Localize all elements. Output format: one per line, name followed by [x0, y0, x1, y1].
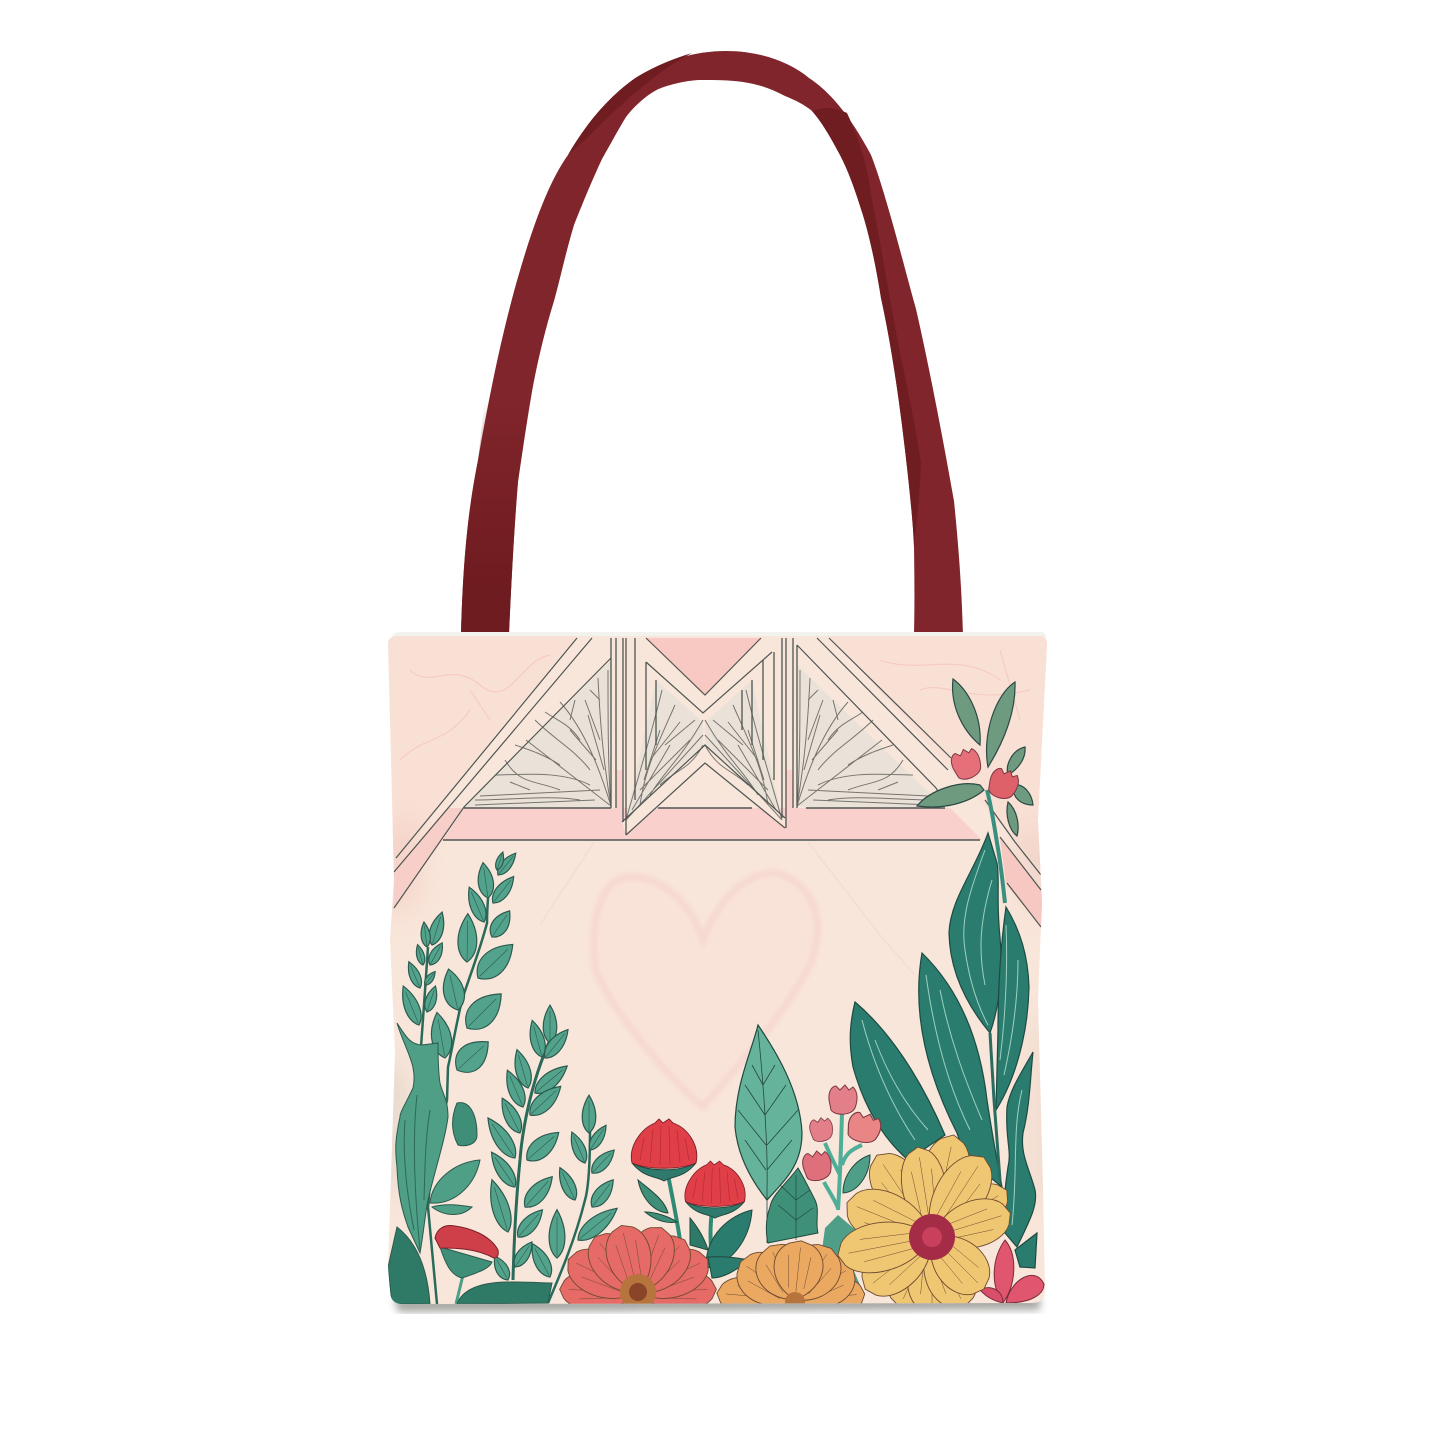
- coral flower: [559, 1225, 717, 1304]
- pink band: [443, 808, 982, 840]
- red left flower: [435, 1226, 552, 1304]
- tote bag illustration: [388, 51, 1047, 1314]
- orange flower: [716, 1240, 866, 1304]
- tall left plant: [388, 850, 521, 1304]
- triangle leaf panels: [464, 660, 944, 820]
- middle sprig: [487, 1004, 569, 1281]
- handle strap: [461, 51, 963, 634]
- right small sprig: [526, 1095, 622, 1303]
- main stem leaf: [396, 1023, 448, 1253]
- pink corner flower: [980, 1240, 1044, 1303]
- right top sprig: [917, 679, 1033, 903]
- big centre leaf: [735, 1025, 818, 1243]
- bag body: [385, 632, 1055, 1321]
- striped vertical panels: [611, 638, 797, 835]
- red flowers: [631, 1119, 752, 1278]
- right large teal leaves: [850, 833, 1037, 1268]
- strap shadow folds: [461, 400, 530, 634]
- bag drop shadow: [394, 1296, 1040, 1312]
- yellow flower: [837, 1134, 1011, 1304]
- fold shading: [385, 820, 1048, 1200]
- white inner lining: [392, 632, 1046, 638]
- marble texture: [388, 636, 1048, 975]
- small pink buds: [801, 1085, 884, 1290]
- pink top triangle: [646, 638, 761, 695]
- heart watermark: [594, 873, 817, 1107]
- roof and band lines: [394, 638, 1041, 927]
